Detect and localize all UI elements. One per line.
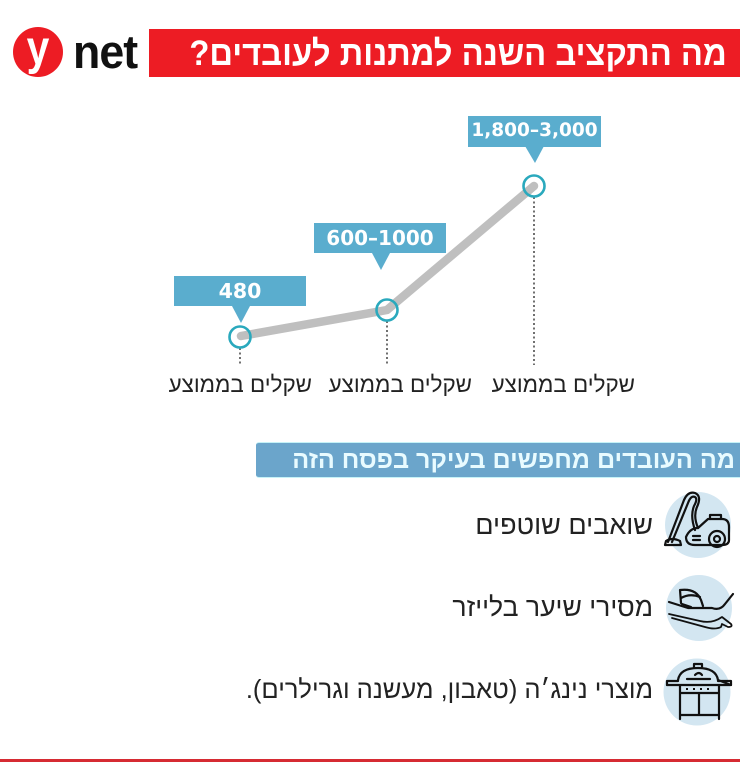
logo letter y: y bbox=[27, 22, 49, 75]
section heading bar bbox=[256, 442, 740, 478]
icon: grill bbox=[664, 658, 732, 726]
logo: ynet bbox=[13, 22, 138, 78]
title text: מה התקציב השנה למתנות לעובדים? bbox=[190, 34, 727, 73]
item text: Ninja products: מוצרי נינג׳ה (טאבון, מעשנה וגרילרים). bbox=[246, 676, 653, 704]
callout: 1,800-3,000: 1,800–3,000 bbox=[471, 120, 598, 141]
callout: 1,800-3,000 bbox=[468, 116, 601, 147]
section heading text: מה העובדים מחפשים בעיקר בפסח הזה bbox=[292, 446, 735, 474]
chart lines bbox=[228, 147, 546, 365]
item text: steam vacuums: שואבים שוטפים bbox=[475, 510, 653, 540]
callout: 600-1000 bbox=[314, 223, 446, 253]
data point markers bbox=[230, 176, 544, 348]
bottom rule bbox=[0, 759, 740, 762]
label: first point unit: שקלים בממוצע bbox=[169, 372, 312, 397]
callout pointers bbox=[232, 146, 544, 323]
icon: vacuum cleaner bbox=[664, 492, 731, 558]
item text: laser hair removers: מסירי שיער בלייזר bbox=[452, 592, 653, 622]
icon: laser hair remover bbox=[666, 575, 734, 641]
logo red circle bbox=[13, 27, 63, 77]
label: second point unit: שקלים בממוצע bbox=[329, 372, 472, 397]
logo word net: net bbox=[73, 25, 137, 78]
dotted drop lines bbox=[240, 197, 534, 365]
callout: 600-1000: 600–1000 bbox=[326, 226, 434, 250]
label: third point unit: שקלים בממוצע bbox=[492, 372, 635, 397]
title banner bbox=[149, 29, 740, 77]
line chart bbox=[228, 147, 546, 365]
callout: 480: 480 bbox=[219, 279, 261, 303]
trend line bbox=[241, 186, 534, 336]
callout: 480 bbox=[174, 276, 306, 306]
